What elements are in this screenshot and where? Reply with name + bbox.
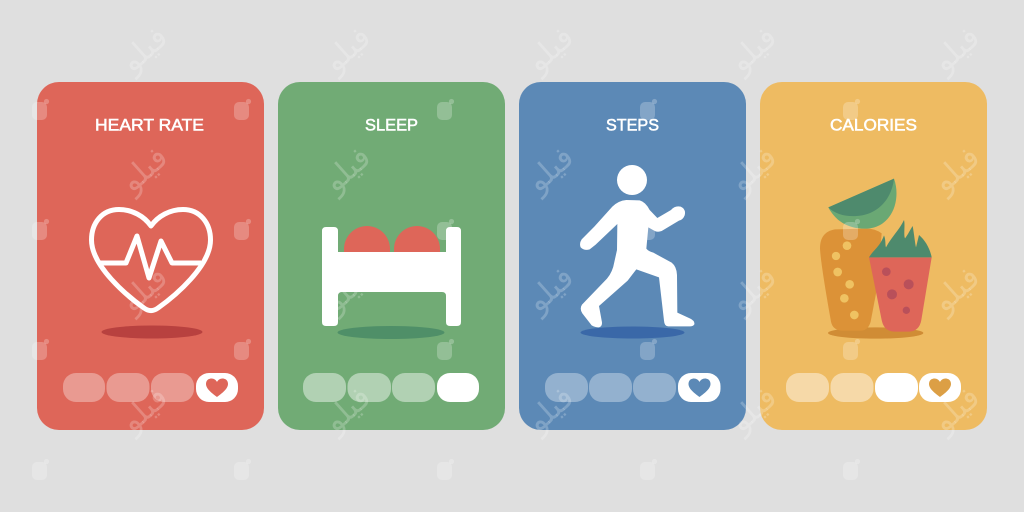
watermark: repeated logo: فيلو <box>721 139 784 201</box>
watermark: repeated logo: فيلو <box>315 259 378 321</box>
panel: calories <box>760 82 987 430</box>
watermark: repeated logo: فيلو <box>721 379 784 441</box>
strawberry <box>869 220 932 332</box>
carrot <box>820 229 882 331</box>
icon: heart with pulse <box>92 210 210 311</box>
watermark: repeated logo: فيلو <box>315 139 378 201</box>
watermark: repeated logo: فيلو <box>112 259 175 321</box>
icon: walking person <box>580 165 694 327</box>
panel: steps <box>519 82 746 430</box>
watermark: repeated logo: فيلو <box>924 139 987 201</box>
progress bar: calories <box>786 373 961 402</box>
watermark: repeated logo: فيلو <box>518 139 581 201</box>
panel: sleep <box>278 82 505 430</box>
progress bar: steps <box>545 373 720 402</box>
icon: bed <box>322 226 461 326</box>
watermark: repeated logo: فيلو <box>315 19 378 81</box>
heading: sleep: SLEEP <box>365 116 418 134</box>
watermark: repeated logo: فيلو <box>924 259 987 321</box>
progress bar: sleep <box>303 373 479 402</box>
watermark: repeated logo: فيلو <box>112 19 175 81</box>
watermark: repeated logo: فيلو <box>518 379 581 441</box>
shadow: heart <box>102 326 202 338</box>
watermark: repeated logo: فيلو <box>721 259 784 321</box>
watermark: repeated logo: فيلو <box>112 379 175 441</box>
watermark: repeated logo: فيلو <box>518 259 581 321</box>
shadow: food <box>828 327 923 339</box>
shadow: bed <box>338 326 444 339</box>
watermark: repeated logo: فيلو <box>924 19 987 81</box>
leaf bowl <box>828 179 897 229</box>
watermark: repeated logo: فيلو <box>924 379 987 441</box>
heading: heart rate: HEART RATE <box>95 116 204 134</box>
watermark: repeated logo: فيلو <box>315 379 378 441</box>
shadow: runner <box>580 326 684 338</box>
panel: heart rate <box>37 82 264 430</box>
icon: food <box>820 179 932 339</box>
watermark: repeated logo: فيلو <box>518 19 581 81</box>
heading: steps: STEPS <box>606 116 659 134</box>
watermark: repeated logo: فيلو <box>112 139 175 201</box>
watermark: repeated logo: فيلو <box>721 19 784 81</box>
heading: calories: CALORIES <box>830 116 917 134</box>
progress bar: heart rate <box>63 373 238 402</box>
